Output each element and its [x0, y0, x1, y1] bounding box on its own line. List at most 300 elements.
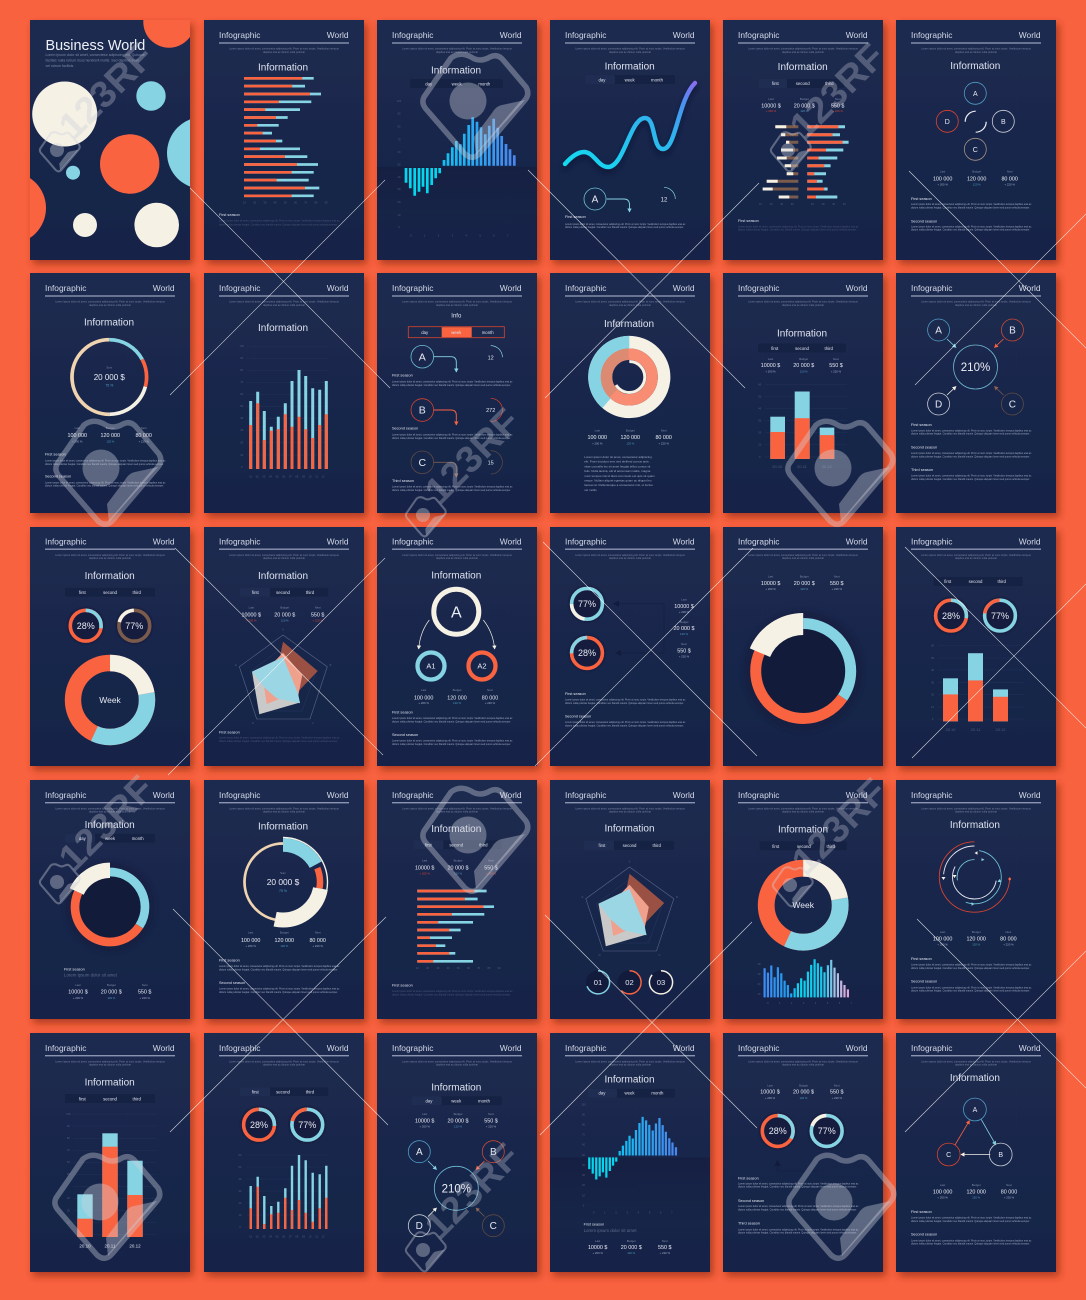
stats: 100 000: [68, 433, 87, 439]
header: Lorem ipsum dolor sit amet, consectetur adipiscing elit. Proin at nunc turpis. Vestibulum tempus: [748, 47, 858, 51]
header: dapibus erat ac dictum nulla pulvinar: [436, 50, 478, 54]
tabs: month: [482, 330, 494, 335]
stats: 10000 $: [415, 1119, 434, 1125]
tabs: day: [425, 81, 433, 86]
header: [911, 790, 1041, 814]
stats: 120 %: [106, 439, 115, 443]
step B: [411, 398, 502, 425]
column chart: 40: [239, 1177, 242, 1181]
stats: Next: [835, 97, 841, 101]
tabs: second: [103, 1096, 118, 1101]
connector arrows: [614, 604, 664, 653]
stats: + 220 %: [832, 1096, 842, 1100]
header: Infographic: [738, 536, 779, 546]
header: [392, 790, 522, 814]
seasons text: [219, 958, 340, 994]
stats: Next: [833, 357, 839, 361]
stats: 550 $: [831, 103, 844, 109]
stats: + 220 %: [833, 109, 843, 113]
stats: 10000 $: [415, 865, 434, 871]
stats: 10000 $: [760, 1090, 780, 1096]
stats: 80 000: [1000, 937, 1017, 943]
column chart: 50: [239, 1165, 242, 1169]
circle diagram: D: [945, 119, 950, 126]
panel: ring with sector and stats: [30, 780, 190, 1019]
radar chart: [235, 628, 332, 725]
column chart: 60: [239, 1153, 242, 1157]
tabs: third: [827, 844, 835, 849]
third season text: dictum nulla pulvinar feugiat. Curabitur nec blandit mauris. Quisque aliquam lorem sed purus vehicula semper.: [392, 489, 511, 492]
header: dapibus erat ac dictum nulla pulvinar: [782, 810, 824, 814]
diagram: C: [1009, 400, 1016, 410]
cover text: vel rutrum facilisis.: [46, 64, 74, 68]
panel: A to A1 A2 tree: [377, 527, 537, 766]
first season text: [392, 374, 513, 387]
header: Infographic: [565, 30, 606, 40]
header: Infographic: [911, 536, 952, 546]
connector arrow: [778, 1161, 818, 1171]
header: Infographic: [911, 283, 952, 293]
column chart: 01 02 03 04 05 06 07 08 09 10 11 12: [249, 1234, 325, 1238]
bar chart: 50: [582, 1153, 585, 1157]
seasons text: Lorem ipsum dolor sit amet, consectetur adipiscing elit. Proin at nunc turpis. Vestibulum tempus dapibus erat ac: [738, 1205, 859, 1208]
circle diagram: B: [1001, 119, 1006, 126]
header: Infographic: [738, 283, 779, 293]
stats: Budget: [106, 426, 115, 430]
panel: butterfly bars: [723, 20, 883, 260]
butterfly chart: 10 20 30 40: [759, 202, 794, 206]
seasons text: Lorem ipsum dolor sit amet, consectetur adipiscing elit. Proin at nunc turpis. Vestibulum tempus dapibus erat ac: [392, 740, 513, 743]
stats: 120 %: [972, 942, 981, 946]
heading: Information: [604, 824, 655, 835]
stats: 100 000: [588, 435, 607, 441]
stats: Last: [767, 1083, 773, 1087]
header: dapibus erat ac dictum nulla pulvinar: [263, 303, 305, 307]
stats: + 220 %: [486, 1125, 497, 1129]
triangle diagram: B: [998, 1152, 1003, 1159]
seasons text: dictum nulla pulvinar feugiat. Curabitur nec blandit mauris. Quisque aliquam lorem sed purus vehicula semper.: [738, 1232, 857, 1235]
header: Infographic: [565, 790, 606, 800]
tabs: [65, 834, 155, 843]
stats: 120 000: [967, 177, 986, 183]
stats: 100 000: [241, 938, 260, 944]
stats: 20 000 $: [101, 990, 122, 996]
stats: 80 000: [1001, 177, 1018, 183]
paragraph: felis. Nulla lacinia, elit id accumsan mattis, magna: [584, 469, 651, 473]
heading: Information: [431, 65, 481, 76]
tabs: second: [449, 842, 464, 847]
seasons text: dictum nulla pulvinar feugiat. Curabitur nec blandit mauris. Quisque aliquam lorem sed purus vehicula semper.: [911, 1243, 1030, 1246]
stats: 80 000: [1001, 1190, 1017, 1196]
stats: 120 000: [275, 938, 294, 944]
bar chart: [397, 99, 514, 238]
stats: Budget: [453, 688, 462, 692]
panel: positive negative bars with stats: [550, 1033, 710, 1272]
ring chart: 20 000 $: [94, 373, 125, 382]
heading: Information: [85, 820, 135, 831]
stats: + 200 %: [72, 439, 83, 443]
seasons text: First season: [45, 452, 66, 456]
stats: + 200 %: [593, 1251, 603, 1255]
radar chart: A: [282, 628, 284, 632]
stats: Budget: [800, 97, 809, 101]
heading: Information: [431, 571, 481, 582]
bar chart: 60: [582, 1143, 585, 1147]
header: Lorem ipsum dolor sit amet, consectetur adipiscing elit. Proin at nunc turpis. Vestibulum tempus: [921, 47, 1031, 51]
radar chart: D: [599, 953, 601, 957]
stats: Last: [768, 575, 773, 579]
seasons text: Lorem ipsum dolor sit amet, consectetur adipiscing elit. Proin at nunc turpis. Vestibulum tempus dapibus erat ac: [911, 203, 1032, 206]
seasons text: dictum nulla pulvinar feugiat. Curabitur nec blandit mauris. Quisque aliquam lorem sed purus vehicula semper.: [911, 990, 1030, 993]
diagram: C: [490, 1221, 497, 1232]
seasons text: dictum nulla pulvinar feugiat. Curabitur nec blandit mauris. Quisque aliquam lorem sed purus vehicula semper.: [565, 702, 684, 705]
header: Infographic: [911, 790, 952, 800]
cover circles: [30, 20, 190, 248]
stats: Next: [487, 688, 493, 692]
step A: 12: [488, 356, 494, 362]
seasons text: [911, 1210, 1032, 1246]
column chart: 20.12: [129, 1243, 141, 1248]
second season text: Lorem ipsum dolor sit amet, consectetur adipiscing elit. Proin at nunc turpis. Vestibulum tempus dapibus erat ac: [392, 434, 513, 437]
column chart: 80: [67, 1136, 70, 1140]
stats: 20 000 $: [794, 581, 815, 587]
title: Business World: [46, 38, 145, 54]
third season text: Third season: [392, 479, 414, 483]
panel: concentric arrows: [896, 780, 1056, 1019]
tabs: [65, 1094, 155, 1103]
header: Lorem ipsum dolor sit amet, consectetur adipiscing elit. Proin at nunc turpis. Vestibulum tempus: [748, 553, 858, 557]
first season text: [64, 967, 118, 978]
tabs: [413, 840, 502, 849]
seasons text: Lorem ipsum dolor sit amet, consectetur adipiscing elit. Proin at nunc turpis. Vestibulum tempus dapibus erat ac: [738, 1228, 859, 1231]
panel: segmented sum ring: [204, 780, 364, 1019]
ring 01: [586, 970, 610, 994]
bar chart: 60: [398, 150, 401, 154]
header: [565, 30, 695, 54]
header: Infographic: [219, 283, 260, 293]
column chart: 40: [758, 406, 762, 410]
stats: 120 %: [454, 1125, 462, 1129]
header: World: [673, 536, 695, 546]
week donut: [73, 663, 147, 737]
seasons text: dictum nulla pulvinar feugiat. Curabitur nec blandit mauris. Quisque aliquam lorem sed purus vehicula semper.: [738, 1186, 857, 1189]
stats: 80 000: [135, 433, 152, 439]
seasons text: Second season: [911, 446, 937, 450]
ring 77 percent: 77%: [578, 599, 596, 609]
seasons text: First season: [219, 958, 240, 962]
stats: [761, 575, 844, 591]
column chart: 40: [931, 668, 935, 672]
stats: 550 $: [484, 865, 498, 871]
stats: 120 %: [800, 109, 809, 113]
stats: Last: [422, 1112, 428, 1116]
ring 03: 03: [657, 978, 665, 987]
stats: Budget: [280, 931, 289, 935]
first season text: [565, 215, 686, 229]
bar chart: 50: [398, 163, 401, 167]
stats: Last: [75, 426, 80, 430]
column chart: 60: [758, 382, 762, 386]
panel: rings and three columns: [896, 527, 1056, 766]
diagram: [928, 319, 1023, 415]
seasons text: Lorem ipsum dolor sit amet, consectetur adipiscing elit. Proin at nunc turpis. Vestibulum tempus dapibus erat ac: [911, 1217, 1032, 1220]
overlay: small camera marks and 123RF text: 123RF: [51, 768, 162, 879]
header: [738, 790, 868, 814]
tabs: day: [599, 77, 606, 82]
seasons text: dictum nulla pulvinar feugiat. Curabitur nec blandit mauris. Quisque aliquam lorem sed purus vehicula semper.: [738, 1208, 857, 1212]
heading: Information: [950, 61, 1000, 72]
ring 28 percent: [932, 597, 970, 634]
seasons text: dictum nulla pulvinar feugiat. Curabitur nec blandit mauris. Quisque aliquam lorem sed purus vehicula semper.: [911, 1220, 1030, 1223]
tree diagram: A1: [426, 662, 436, 671]
stats: 120 000: [966, 937, 986, 943]
header: Infographic: [565, 1043, 606, 1053]
step A: A: [419, 352, 426, 364]
bar chart: [243, 78, 328, 205]
header: Infographic: [392, 536, 433, 546]
stats: [588, 428, 672, 446]
panel: nested donut: [550, 273, 710, 513]
stats: 20 000 $: [793, 1090, 814, 1096]
butterfly chart: [759, 127, 849, 206]
header: World: [327, 1043, 349, 1053]
bar chart: 10: [398, 213, 401, 217]
tabs: month: [651, 77, 664, 82]
tree diagram: [418, 589, 496, 680]
header: World: [153, 283, 175, 293]
ring 28 percent: [67, 607, 104, 644]
stats: + 220 %: [486, 871, 497, 875]
tabs: [585, 75, 675, 84]
column chart: 50: [67, 1172, 70, 1176]
seasons text: Second season: [738, 1199, 764, 1203]
stats: 120 %: [800, 1096, 808, 1100]
seasons text: First season: [392, 711, 413, 715]
column chart: 20.10: [772, 464, 783, 469]
column chart: 20.12: [822, 464, 832, 469]
tabs: first: [79, 1096, 87, 1101]
first season text: First season: [584, 1223, 604, 1227]
header: [392, 30, 522, 54]
ring 77 percent: 77%: [298, 1120, 316, 1130]
stats: Next: [142, 983, 148, 987]
column chart: 30: [240, 428, 244, 432]
first season text: dictum nulla pulvinar feugiat. Curabitur nec blandit mauris. Quisque aliquam lorem sed purus vehicula semper.: [219, 740, 338, 743]
header: Lorem ipsum dolor sit amet, consectetur adipiscing elit. Proin at nunc turpis. Vestibulum tempus: [575, 300, 685, 304]
stats: 120 %: [453, 701, 461, 705]
header: Lorem ipsum dolor sit amet, consectetur adipiscing elit. Proin at nunc turpis. Vestibulum tempus: [229, 47, 339, 51]
tabs: second: [276, 590, 291, 595]
tabs: third: [998, 579, 1006, 584]
radar chart: A: [629, 860, 631, 864]
ring 77 percent: 77%: [991, 611, 1009, 621]
step C: C: [419, 457, 427, 469]
header: [911, 30, 1041, 54]
tree diagram: A2: [477, 662, 487, 671]
tabs: week: [105, 836, 116, 841]
panel: positive negative bars: [377, 20, 537, 260]
stats: 550 $: [830, 581, 844, 587]
seasons text: dictum nulla pulvinar feugiat. Curabitur nec blandit mauris. Quisque aliquam lorem sed purus vehicula semper.: [911, 206, 1030, 209]
tabs: second: [796, 81, 810, 86]
seasons text: dictum nulla pulvinar feugiat. Curabitur nec blandit mauris. Quisque aliquam lorem sed purus vehicula semper.: [911, 455, 1030, 458]
header: dapibus erat ac dictum nulla pulvinar: [609, 1062, 651, 1066]
tabs: [759, 79, 844, 88]
stats: Budget: [800, 575, 809, 579]
header: World: [327, 536, 349, 546]
stats: 20 000 $: [793, 363, 814, 369]
panel: cover Business World: [28, 19, 198, 269]
diagram: A: [935, 326, 942, 336]
stats: [68, 983, 151, 1000]
first season text: dictum nulla pulvinar feugiat. Curabitur nec blandit mauris. Quisque aliquam lorem sed purus vehicula semper.: [738, 228, 857, 232]
header: [738, 30, 868, 54]
diagram: [408, 1141, 504, 1237]
column chart: 40: [240, 416, 244, 420]
column chart: 100: [66, 1112, 71, 1116]
column chart: 0: [239, 1225, 241, 1229]
header: dapibus erat ac dictum nulla pulvinar: [782, 303, 824, 307]
header: dapibus erat ac dictum nulla pulvinar: [263, 1062, 305, 1066]
paragraph: vitae convallis leo sit amet feugiat tellus cursus sit: [584, 464, 650, 468]
tabs: day: [79, 836, 87, 841]
overlay: small camera marks and 123RF text: 123RF: [417, 401, 528, 512]
header: World: [327, 30, 349, 40]
heading: Information: [950, 1073, 1000, 1084]
tabs: [412, 1096, 502, 1105]
radar chart: B: [330, 663, 332, 667]
cover text: facilisis nulla rutrum risus hendrerit mollis. Sed dapibus enim: [46, 58, 139, 62]
stats: Budget: [454, 858, 463, 862]
seasons text: dictum nulla pulvinar feugiat. Curabitur nec blandit mauris. Quisque aliquam lorem sed purus vehicula semper.: [911, 229, 1030, 232]
header: World: [673, 790, 695, 800]
stats: Last: [595, 428, 600, 432]
header: [392, 283, 522, 307]
bar chart: 20: [582, 1183, 585, 1187]
tabs: second: [623, 843, 637, 848]
bar chart: 0: [398, 225, 400, 229]
stats: + 200 %: [246, 944, 256, 948]
header: dapibus erat ac dictum nulla pulvinar: [782, 1062, 824, 1066]
diagram: 210%: [442, 1183, 471, 1195]
bar chart: 40: [582, 1163, 585, 1167]
tabs: first: [252, 590, 260, 595]
stats: 100 000: [933, 937, 952, 943]
stats: 80 000: [655, 435, 672, 441]
panel: three stacked columns: [723, 273, 883, 513]
column chart: 10: [67, 1221, 70, 1225]
paragraph: neque. Nullam aliquet egestas quam ac aliquet leo: [584, 478, 652, 482]
header: Lorem ipsum dolor sit amet, consectetur adipiscing elit. Proin at nunc turpis. Vestibulum tempus: [575, 1059, 685, 1063]
bar chart: [758, 959, 853, 1005]
header: Infographic: [392, 1043, 433, 1053]
butterfly chart: 10 20 30 40: [811, 202, 846, 206]
header: Lorem ipsum dolor sit amet, consectetur adipiscing elit. Proin at nunc turpis. Vestibulum tempus: [55, 553, 165, 557]
stats: + 200 %: [592, 442, 603, 446]
bar chart: 20: [758, 982, 761, 986]
seasons text: First season: [738, 1176, 759, 1180]
header: [392, 536, 522, 560]
panel: ring sum: [30, 273, 190, 513]
tabs: day: [426, 1099, 433, 1104]
seasons text: Second season: [911, 980, 937, 984]
stats: 120 %: [800, 369, 808, 373]
stats: 550 $: [311, 612, 324, 618]
diagram: B: [490, 1147, 497, 1158]
column chart: 20.12: [995, 727, 1006, 732]
tabs: [584, 841, 674, 850]
column chart: 20: [239, 1201, 242, 1205]
header: [45, 1043, 175, 1066]
stats: Budget: [799, 357, 808, 361]
seasons text: Lorem ipsum dolor sit amet, consectetur adipiscing elit. Proin at nunc turpis. Vestibulum tempus dapibus erat ac: [565, 721, 686, 724]
ring chart: Sum: [106, 366, 113, 370]
stats: 20 000 $: [274, 612, 295, 618]
tabs: [760, 841, 847, 850]
header: Lorem ipsum dolor sit amet, consectetur adipiscing elit. Proin at nunc turpis. Vestibulum tempus: [229, 300, 339, 304]
diagram: 210%: [961, 362, 990, 374]
seasons text: dictum nulla pulvinar feugiat. Curabitur nec blandit mauris. Quisque aliquam lorem sed purus vehicula semper.: [565, 724, 684, 728]
stats: + 200 %: [246, 618, 257, 622]
first season text: Lorem ipsum dolor sit amet: [64, 972, 118, 978]
concentric arcs: [939, 842, 1011, 912]
stats: Last: [768, 357, 773, 361]
tabs: day: [421, 330, 429, 335]
ring 02: [618, 970, 642, 994]
tabs: second: [969, 579, 983, 584]
ring 01: 01: [594, 978, 602, 987]
ring 28 percent: 28%: [769, 1126, 787, 1136]
stats: 10000 $: [68, 990, 88, 996]
bar chart: 70: [582, 1133, 585, 1137]
header: World: [153, 790, 175, 800]
header: [565, 790, 695, 814]
tabs: month: [651, 1091, 664, 1096]
column chart: 10: [931, 705, 935, 709]
tabs: week: [452, 81, 463, 86]
stats: [68, 426, 152, 443]
tabs: third: [133, 590, 141, 595]
stats: Last: [940, 930, 945, 934]
column chart: 30: [67, 1196, 70, 1200]
number gauge 12: 12: [661, 198, 668, 204]
third season text: [392, 479, 513, 492]
header: [911, 283, 1041, 307]
seasons text: Lorem ipsum dolor sit amet, consectetur adipiscing elit. Proin at nunc turpis. Vestibulum tempus dapibus erat ac: [911, 474, 1032, 478]
cover text: Lorem ipsum dolor sit amet, consectetur adipiscing elit. Quisque: [46, 53, 145, 57]
tabs: [934, 577, 1023, 586]
tabs: first: [944, 579, 952, 584]
stats: + 220 %: [313, 618, 323, 622]
header: Lorem ipsum dolor sit amet, consectetur adipiscing elit. Proin at nunc turpis. Vestibulum tempus: [575, 553, 685, 557]
ring chart: Sum: [280, 871, 287, 875]
bar chart: [581, 1102, 676, 1214]
nested donut: [594, 342, 664, 412]
circle diagram: A: [973, 91, 978, 98]
bar chart: 0 1 2 3 4 5 6 7: [767, 1001, 853, 1005]
header: World: [846, 790, 868, 800]
stats: Next: [141, 426, 147, 430]
triangle diagram: A: [973, 1107, 978, 1114]
header: [392, 1043, 522, 1066]
header: Infographic: [219, 790, 260, 800]
stats: 550 $: [830, 1090, 844, 1096]
column chart: 20: [758, 431, 762, 435]
header: Infographic: [392, 30, 433, 40]
seasons text: Second season: [219, 981, 245, 985]
overlay: small camera marks and 123RF text: 123RF: [51, 36, 162, 147]
header: World: [500, 1043, 522, 1053]
